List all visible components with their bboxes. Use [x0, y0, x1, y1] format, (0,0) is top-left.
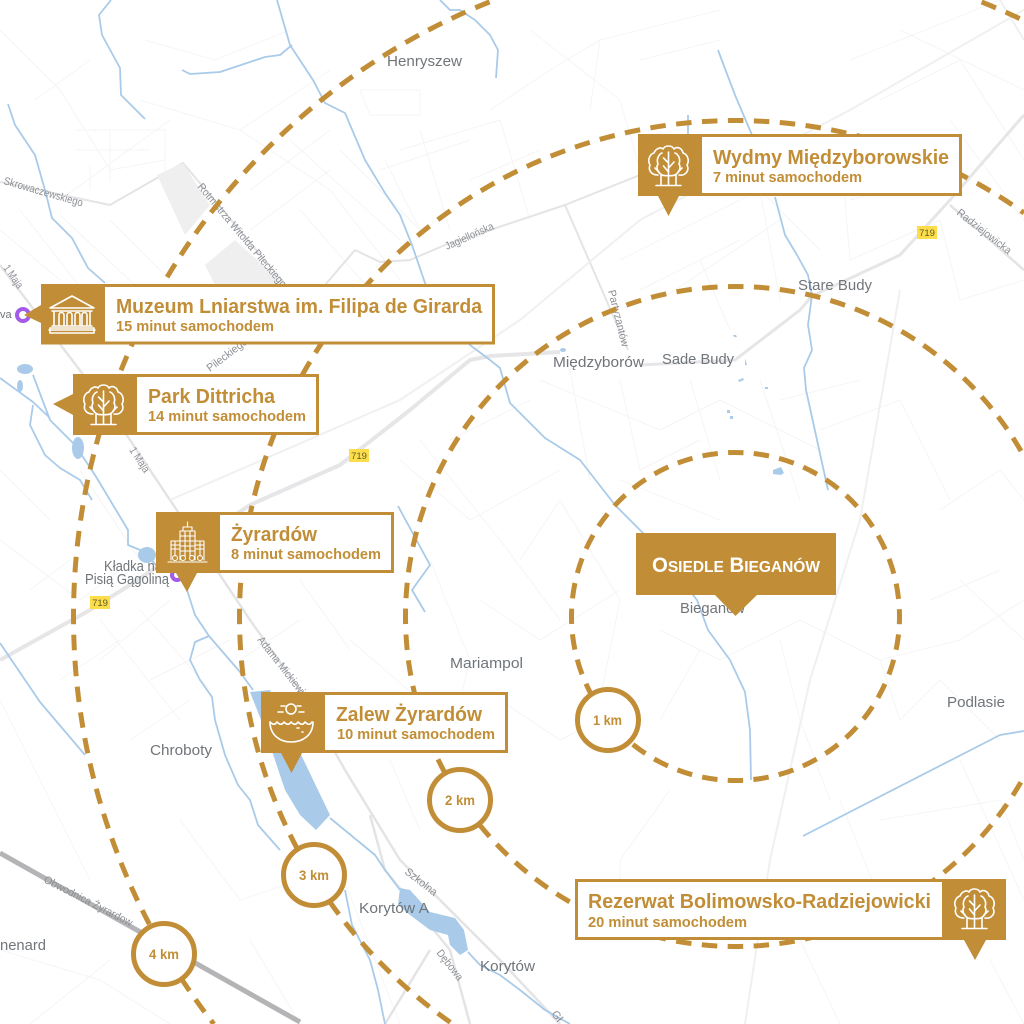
card: Zalew Żyrardów: Zalew Żyrardów	[336, 703, 482, 726]
road number shields	[90, 226, 937, 609]
street names: Skrowaczewskiego	[2, 175, 84, 209]
place names: Henryszew	[387, 54, 463, 70]
badge: 1 km	[578, 690, 638, 750]
icon: tree	[955, 889, 994, 928]
card: Rezerwat Bolimowsko-Radziejowicki: Rezerwat Bolimowsko-Radziejowicki	[588, 891, 931, 913]
card: Rezerwat Bolimowsko-Radziejowicki: 20 minut samochodem	[588, 915, 747, 931]
badge: 4 km: 4 km	[149, 946, 179, 962]
street names: 1 Maja	[1, 263, 26, 292]
street names: Rotmistrza Witolda Pileckiego	[195, 181, 289, 290]
badge: 2 km: 2 km	[445, 792, 475, 808]
place names: Mariampol	[450, 656, 523, 672]
card: Zalew Żyrardów	[261, 692, 506, 773]
motorway	[0, 853, 300, 1022]
card: Żyrardów: 8 minut samochodem	[231, 547, 381, 563]
place names: Bieganów	[680, 601, 746, 617]
street names: Jagiellońska	[443, 220, 496, 253]
card: Park Dittricha: Park Dittricha	[148, 386, 276, 408]
card: Wydmy Międzyborowskie: 7 minut samochodem	[713, 170, 862, 186]
card: Muzeum Lniarstwa: Muzeum Lniarstwa im. Filipa de Girarda	[116, 296, 483, 318]
place names: Podlasie	[947, 695, 1005, 711]
icon: lake	[270, 704, 313, 742]
place names: va	[0, 309, 12, 321]
street names: Adama Mickiewicza	[255, 634, 317, 709]
grey blocks	[157, 163, 285, 285]
place names: Stare Budy	[798, 278, 873, 294]
road number shields: 719	[92, 598, 108, 609]
icon: tree	[84, 385, 123, 424]
lakes	[17, 335, 784, 955]
card: Wydmy Międzyborowskie	[638, 134, 960, 216]
card: Zalew Żyrardów: 10 minut samochodem	[337, 727, 495, 743]
card: Żyrardów: Żyrardów	[231, 523, 317, 546]
badge: 2 km	[430, 770, 490, 830]
place names: Kładka na	[104, 559, 163, 575]
card: Żyrardów	[156, 512, 392, 592]
street names: Radziejowicka	[954, 207, 1014, 258]
card: Muzeum Lniarstwa	[24, 284, 494, 344]
purple place markers	[17, 309, 182, 580]
icon: tree	[649, 146, 688, 186]
place names: nenard	[0, 938, 46, 954]
road number shields: 719	[919, 228, 935, 239]
card: Wydmy Międzyborowskie: Wydmy Międzyborowskie	[713, 147, 949, 169]
place names: Pisią Gągoliną	[85, 572, 170, 588]
street names: 1 Maja	[126, 445, 152, 476]
street names: Szkolna	[402, 866, 440, 899]
street names: Dębowa	[434, 947, 466, 984]
icon: city buildings	[168, 522, 207, 562]
badge: 4 km	[134, 924, 194, 984]
road number shields: 719	[351, 451, 367, 462]
card: Park Dittricha: 14 minut samochodem	[148, 409, 306, 425]
place names: Sade Budy	[662, 352, 735, 368]
main label: Osiedle Bieganów: OSIEDLE BIEGANÓW	[652, 554, 821, 577]
badge: 3 km	[284, 844, 344, 906]
street names: Partyzantów	[605, 289, 631, 348]
street names: Obwodnica Żyrardow	[42, 873, 135, 929]
card: Muzeum Lniarstwa: 15 minut samochodem	[116, 319, 274, 335]
street names: Pileckiego	[205, 336, 250, 374]
place names: Korytów	[480, 959, 536, 975]
card: Park Dittricha	[53, 374, 318, 435]
badge: 1 km: 1 km	[593, 712, 622, 728]
place names: Międzyborów	[553, 355, 645, 371]
badge: 3 km: 3 km	[299, 867, 329, 883]
card: Rezerwat Bolimowsko-Radziejowicki	[576, 879, 1006, 960]
main label: Osiedle Bieganów	[636, 533, 836, 616]
icon: museum	[49, 296, 95, 333]
place names: Korytów A	[359, 901, 429, 917]
place names: Chroboty	[150, 743, 213, 759]
